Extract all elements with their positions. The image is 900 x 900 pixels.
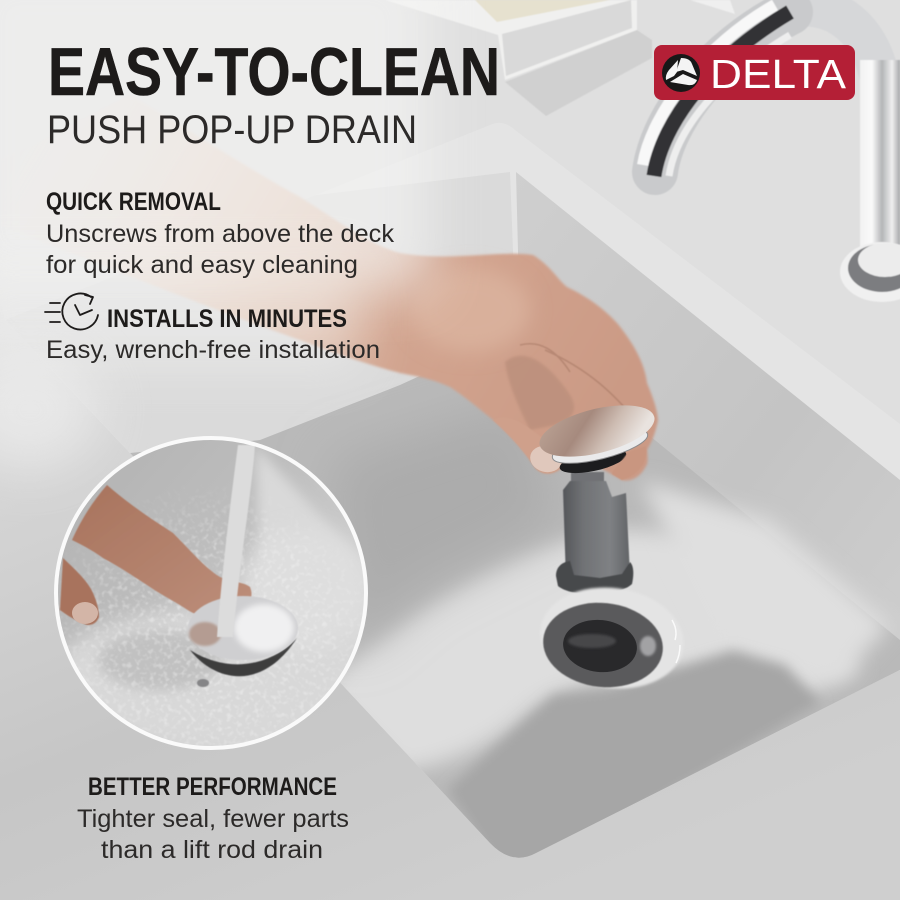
palm highlight [410,268,530,352]
performance heading: BETTER PERFORMANCE [88,773,337,801]
right wall [516,172,900,670]
faucet base [840,242,900,302]
stopper chrome underside [549,422,651,470]
inset water stream [217,445,255,637]
inset wall highlight [253,450,330,546]
quick removal line 1: Unscrews from above the deck [46,220,395,248]
drain halo [534,578,690,698]
stopper stem [563,481,630,585]
text block: quick removal [46,188,395,279]
pop-up drain stopper [534,395,690,698]
faucet dark reflection [654,12,790,176]
inset water surface [66,606,284,744]
thumbnail [527,442,565,476]
white wash behind heading and text [0,0,430,470]
faucet pillar [860,60,900,265]
basin floor dark [130,376,900,858]
shade between fingers [505,356,574,430]
installs description: Easy, wrench-free installation [46,336,380,364]
back wall, left of fold [102,172,513,453]
faucet spout body [655,12,790,172]
faucet white reflection [643,5,775,165]
inset drain dark ring [190,638,297,676]
inset circle: rinsing the drain [54,436,368,750]
stopper neck [571,472,604,494]
logo mark [662,54,700,92]
inset background [58,440,360,648]
title: EASY-TO-CLEAN [48,34,500,110]
drain hole [560,616,640,676]
arm shape [0,95,658,480]
performance line 2: than a lift rod drain [101,836,323,864]
dark upper-left shading [342,420,540,638]
inset debris specks [197,679,209,687]
fingers over cap [612,446,646,480]
quick removal line 2: for quick and easy cleaning [46,251,358,279]
stopper gasket [558,444,628,478]
arm and hand [0,95,658,480]
left and bottom counter [0,300,900,900]
shadow under the drain [447,650,822,870]
inset thumb [60,558,99,625]
inset white ring [56,438,366,748]
drain flange [539,597,667,693]
inset water sparkle [74,510,326,742]
light band through the drain [320,530,860,770]
logo wordmark: DELTA [710,51,847,97]
soap tray [385,0,735,116]
icon: clock with speed lines [45,294,98,330]
upper right wall highlight [640,480,890,680]
subtitle: PUSH POP-UP DRAIN [47,108,417,152]
finger crease [520,344,640,425]
thumb [493,418,562,473]
text block: installs in minutes [46,305,380,364]
Delta logo [654,45,855,100]
faucet lower reflection [669,35,790,176]
basin interior [130,172,900,858]
stopper cap [534,395,660,467]
faucet [643,5,900,302]
installs heading: INSTALLS IN MINUTES [107,305,347,333]
text block: better performance [77,773,349,864]
stopper flange [556,561,633,594]
faucet arch top [780,7,882,100]
performance line 1: Tighter seal, fewer parts [77,805,349,833]
inset lower fingers [72,485,252,620]
quick removal heading: QUICK REMOVAL [46,188,221,216]
inset drain cap [188,596,298,660]
